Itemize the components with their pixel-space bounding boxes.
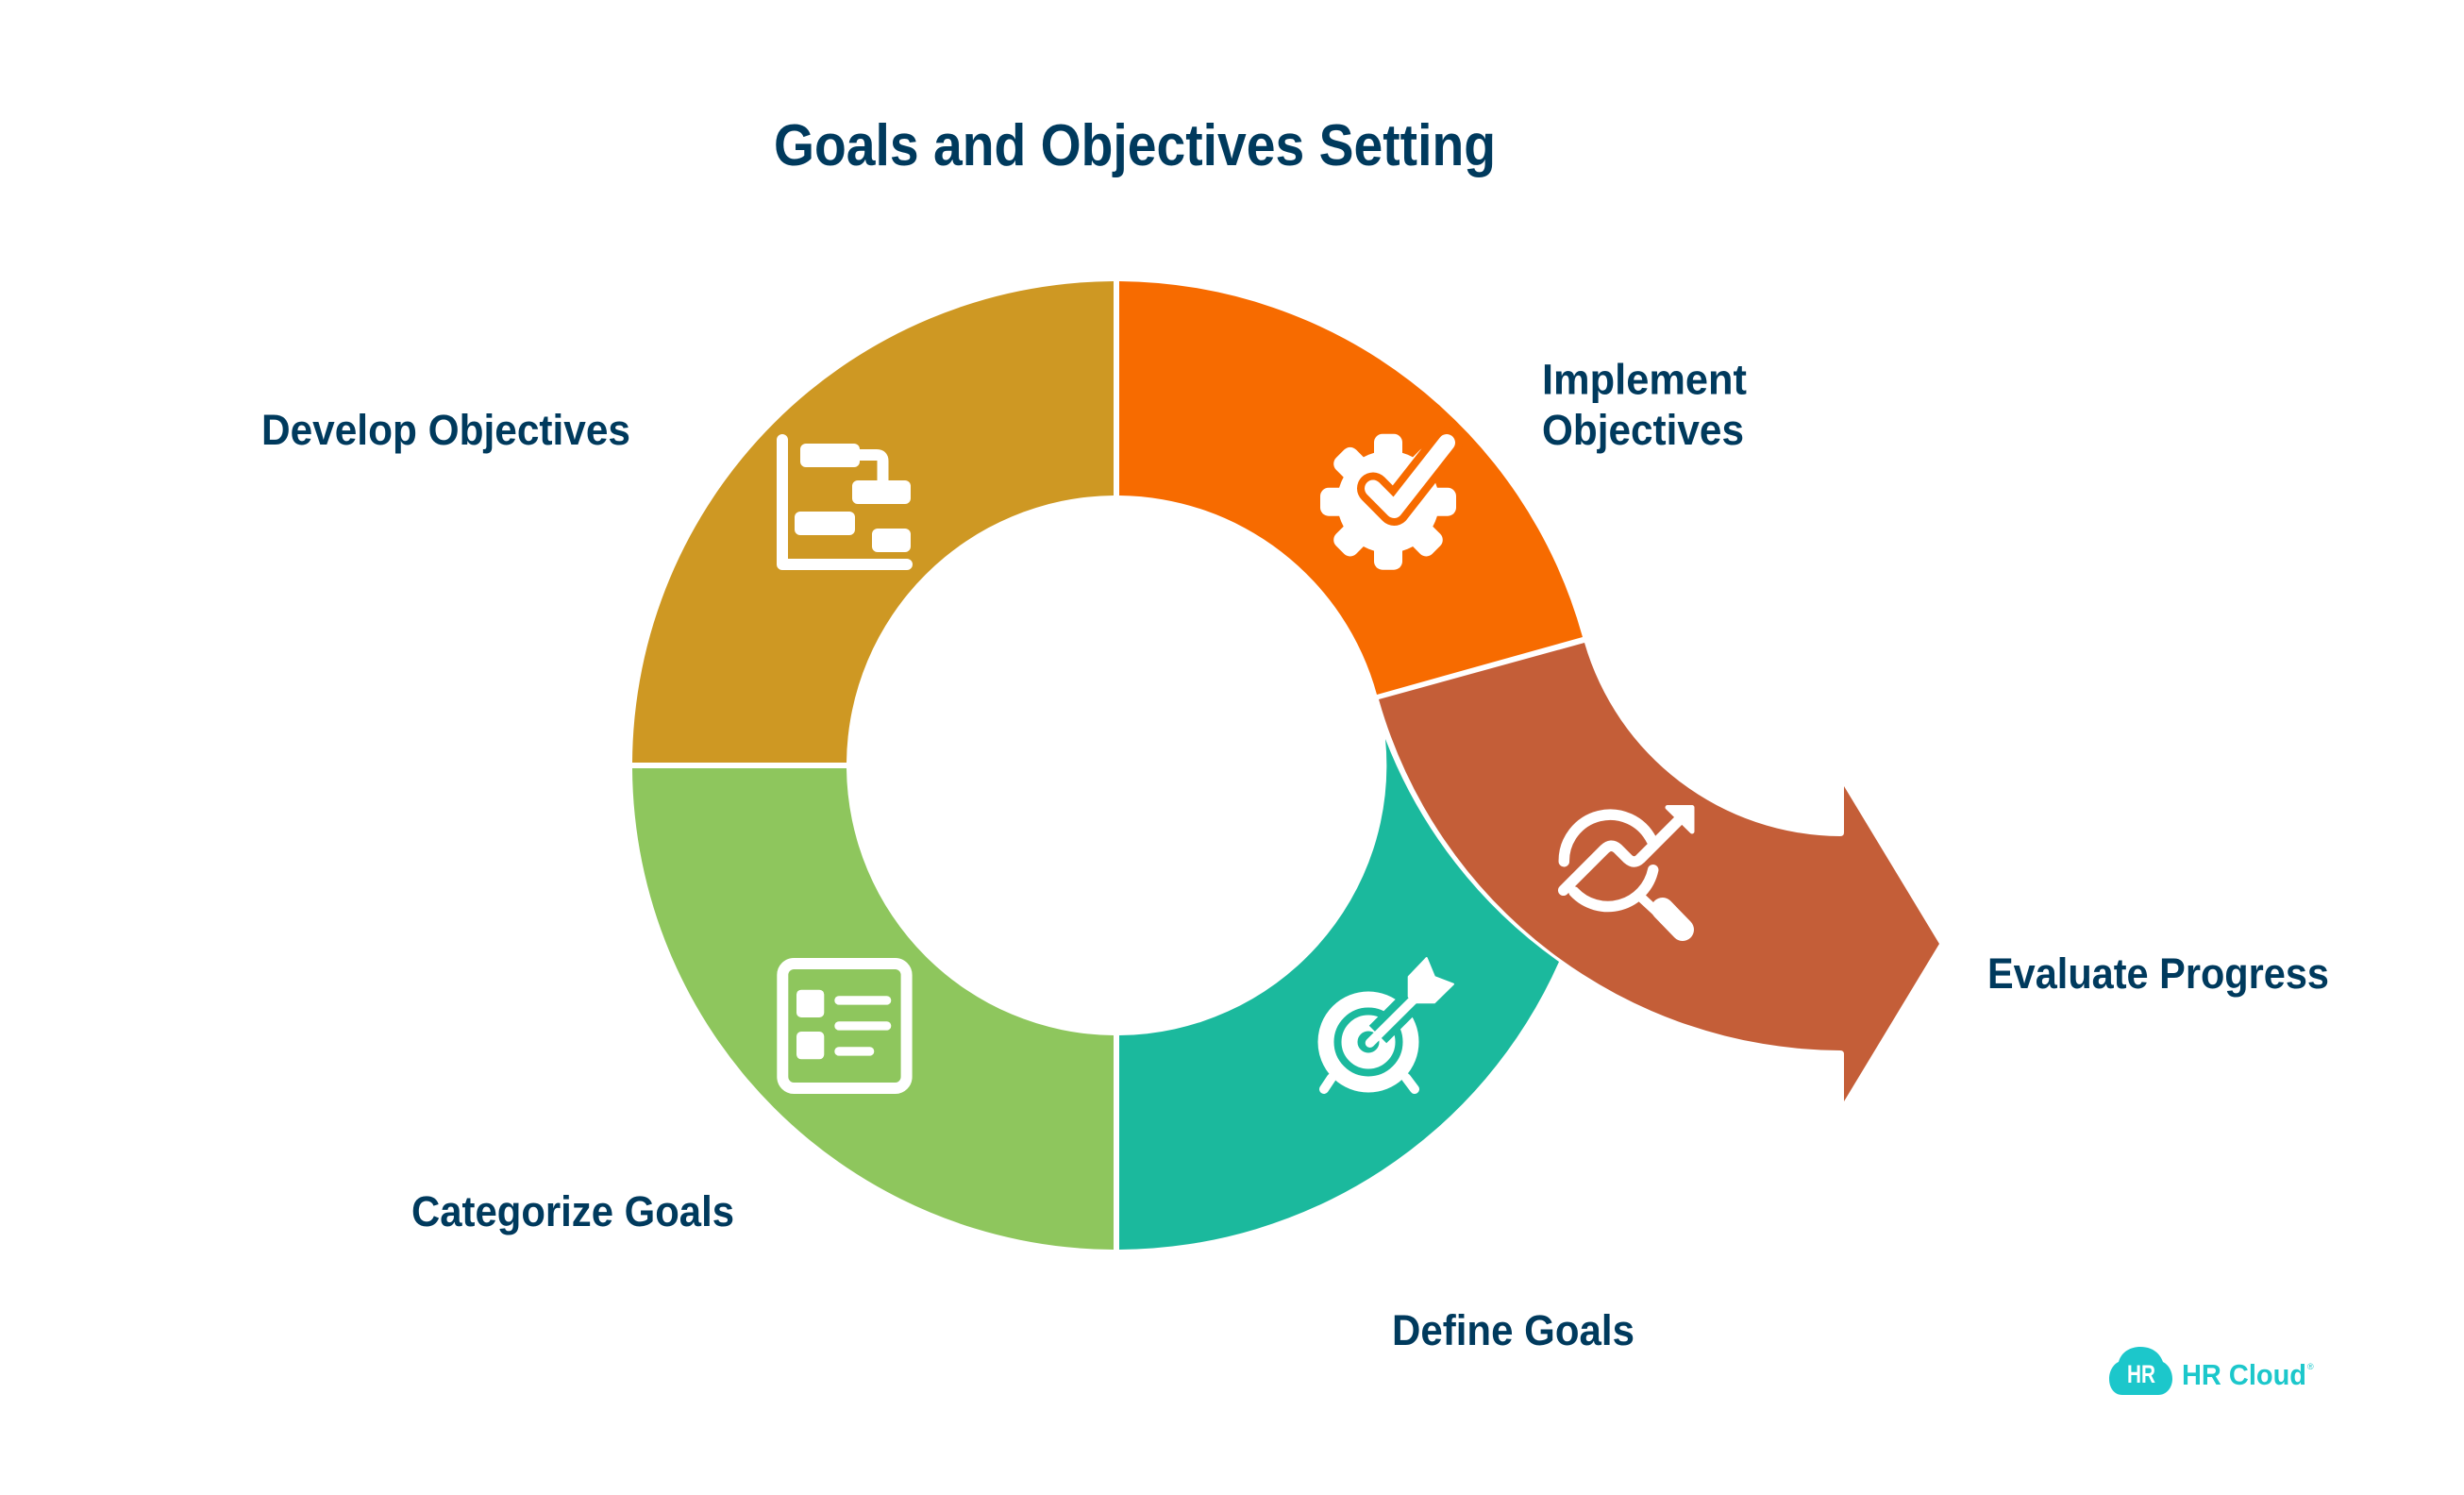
icon: gantt chart — [782, 440, 911, 564]
label: develop objectives: Develop Objectives — [261, 406, 630, 454]
segment: implement objectives (orange) — [1119, 281, 1583, 695]
icon: logo cloud — [2109, 1347, 2172, 1395]
segment: categorize goals (green) — [632, 768, 1114, 1250]
label: evaluate progress: Evaluate Progress — [1987, 949, 2329, 998]
icon: gear with check mark — [1320, 434, 1456, 570]
logo: HR Cloud: ® — [2307, 1362, 2314, 1371]
icon: magnifier with trend arrow — [1564, 808, 1692, 930]
label: implement objectives — [1542, 356, 1747, 454]
label: categorize goals: Categorize Goals — [411, 1187, 734, 1235]
segment: define goals (teal) — [1119, 739, 1559, 1250]
logo: HR Cloud — [2109, 1347, 2314, 1395]
label: implement objectives: Implement — [1542, 356, 1747, 404]
title: Goals and Objectives Setting — [774, 113, 1496, 178]
label: implement objectives: Objectives — [1542, 406, 1744, 454]
logo: HR Cloud: HR — [2127, 1360, 2155, 1388]
icon: checklist — [782, 964, 907, 1088]
segment: develop objectives (gold) — [632, 281, 1114, 763]
icon: target with arrow — [1324, 958, 1453, 1089]
label: define goals: Define Goals — [1392, 1306, 1634, 1354]
segment: evaluate progress arrow (red) — [1379, 643, 1939, 1101]
logo: HR Cloud: HR Cloud — [2182, 1358, 2306, 1391]
